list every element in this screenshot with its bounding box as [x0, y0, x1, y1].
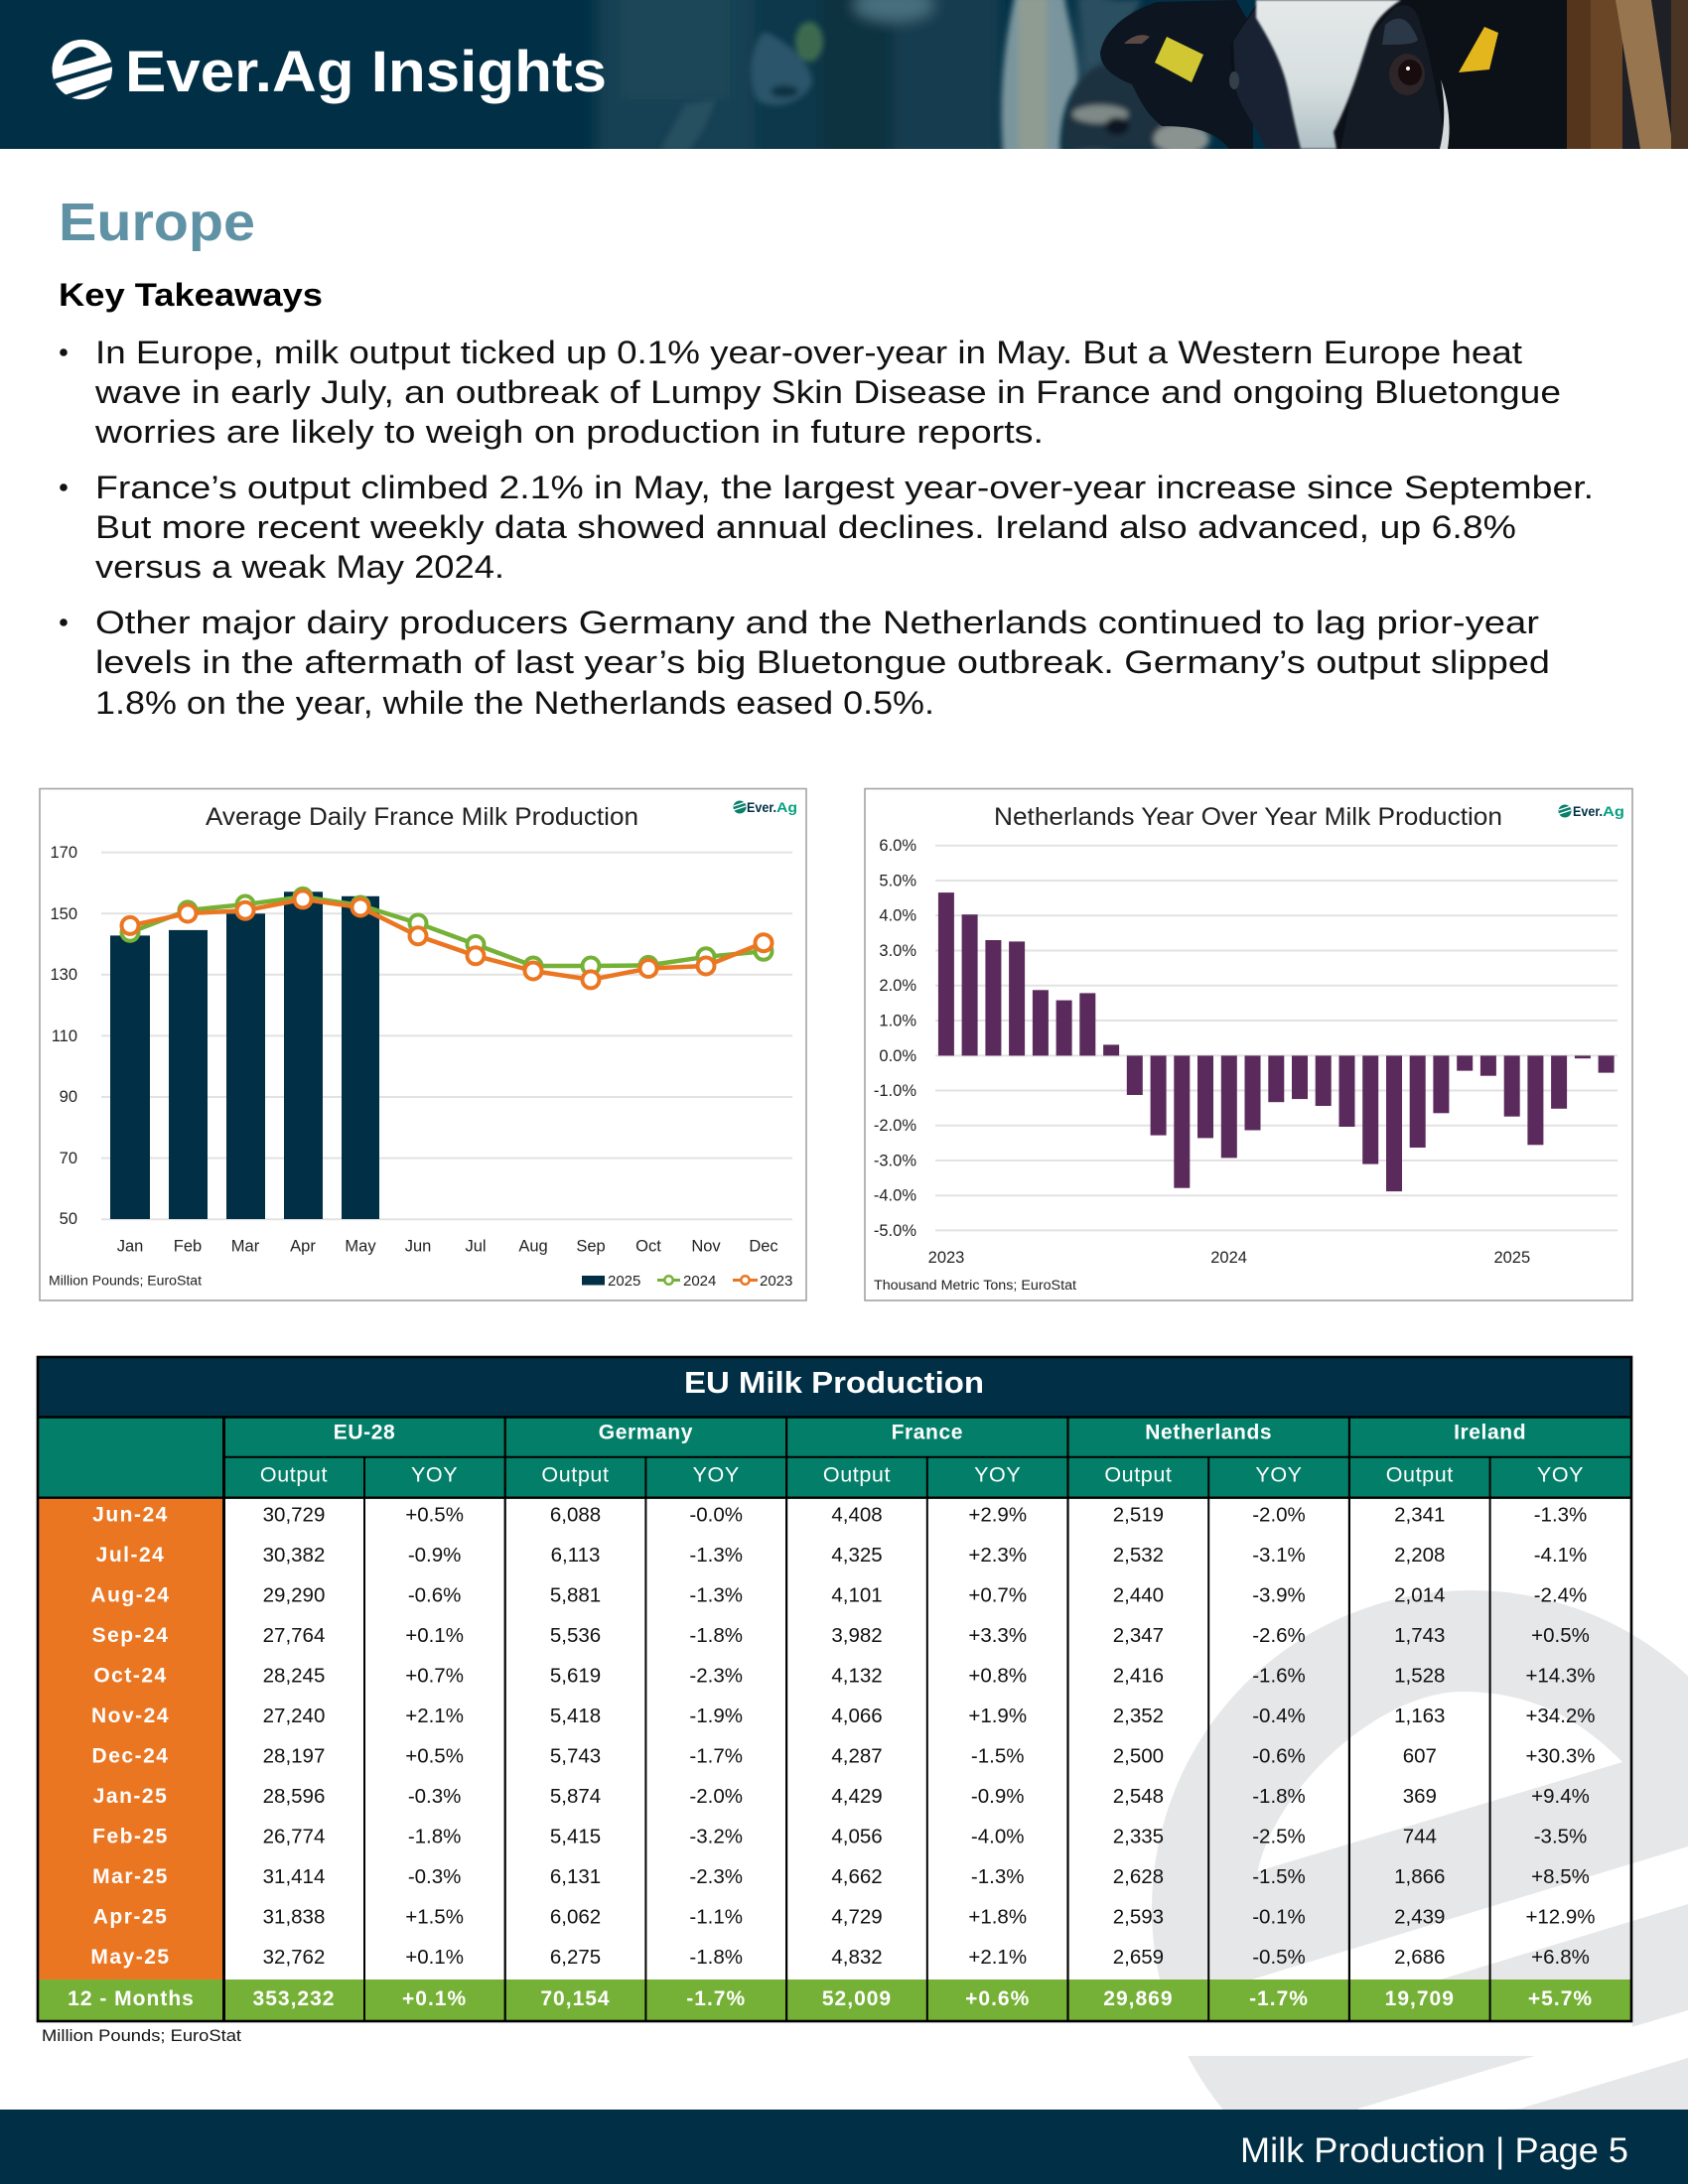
row Jan-25: -0.9% [971, 1785, 1024, 1808]
row May-25: 6,275 [550, 1946, 601, 1969]
row Mar-25: -2.3% [689, 1865, 743, 1888]
table column headers: Output [541, 1463, 610, 1487]
row Nov-24: -0.4% [1252, 1705, 1306, 1727]
row Mar-25 [92, 1865, 1590, 1888]
y axis labels: 150 [50, 905, 77, 923]
row Feb-25: -1.8% [408, 1825, 461, 1848]
row Dec-24: 4,287 [831, 1745, 883, 1767]
row Oct-24: +0.8% [968, 1664, 1027, 1688]
row May-25: May-25 [90, 1946, 171, 1969]
row Apr-25: 31,838 [263, 1906, 325, 1928]
row Jan-25: 5,874 [550, 1785, 601, 1808]
bullet 1: wave in early July, an outbreak of Lumpy Skin Disease in France and ongoing Bluetongue [94, 374, 1561, 410]
row Jan-25: -2.0% [689, 1785, 743, 1808]
row Oct-24: 5,619 [550, 1664, 601, 1688]
table column headers: YOY [411, 1463, 458, 1487]
row Jun-24: -0.0% [689, 1503, 743, 1527]
chart legend: 2023 [760, 1273, 792, 1290]
y axis labels: -4.0% [874, 1187, 916, 1205]
row Sep-24: +0.1% [405, 1624, 464, 1647]
y axis labels [874, 837, 916, 1240]
row Jun-24: +0.5% [405, 1503, 464, 1527]
row Sep-24: 2,347 [1113, 1624, 1164, 1647]
row Nov-24: 2,352 [1113, 1705, 1164, 1727]
chart legend: 2024 [683, 1273, 716, 1290]
bars year over year [938, 892, 1615, 1191]
row Dec-24 [92, 1745, 1596, 1767]
small logo: Ag [1603, 803, 1624, 819]
row Dec-24: -1.5% [971, 1745, 1024, 1767]
brand logo icon [50, 40, 114, 101]
table column headers: France [892, 1422, 963, 1443]
subheading: Key Takeaways: Key Takeaways [59, 277, 323, 313]
row Nov-24: 27,240 [263, 1705, 325, 1727]
row Jan-25: 369 [1403, 1785, 1437, 1808]
row May-25: 2,686 [1394, 1946, 1445, 1969]
row 12 - Months total: 12 - Months [68, 1987, 195, 2010]
row Jun-24: 30,729 [263, 1503, 325, 1527]
row May-25: +2.1% [968, 1946, 1027, 1969]
row Dec-24: Dec-24 [92, 1745, 169, 1767]
row Aug-24: -0.6% [408, 1584, 461, 1606]
chart legend: 2025 [608, 1273, 640, 1290]
chart panel: Average Daily France Milk Production [40, 788, 806, 1300]
row Jul-24: -4.1% [1534, 1544, 1587, 1567]
row Mar-25: -0.3% [408, 1865, 461, 1888]
row Jul-24: 6,113 [551, 1544, 600, 1567]
row Feb-25: 5,415 [550, 1825, 601, 1848]
row Dec-24: -0.6% [1252, 1745, 1306, 1767]
y axis labels: -1.0% [874, 1082, 916, 1100]
header banner [0, 0, 1688, 149]
row Nov-24: 4,066 [831, 1705, 883, 1727]
row Oct-24: 1,528 [1394, 1664, 1445, 1688]
row Apr-25: 4,729 [831, 1906, 883, 1928]
x axis months [117, 1237, 778, 1255]
table title band [38, 1357, 1631, 1417]
y axis labels: 110 [52, 1027, 77, 1045]
x axis years [928, 1249, 1530, 1267]
line 2024 [121, 888, 773, 975]
row May-25: 32,762 [263, 1946, 325, 1969]
row Aug-24: 2,440 [1113, 1584, 1164, 1606]
row Nov-24: Nov-24 [91, 1705, 170, 1727]
row Jan-25: -1.8% [1252, 1785, 1306, 1808]
table 12-month total band [38, 1979, 1631, 2021]
chart source note: Million Pounds; EuroStat [49, 1273, 202, 1289]
row May-25 [90, 1946, 1590, 1969]
table column headers: Output [260, 1463, 328, 1487]
row Oct-24: 4,132 [831, 1664, 883, 1688]
x axis months: Sep [576, 1237, 606, 1255]
row Aug-24: -3.9% [1252, 1584, 1306, 1606]
y axis labels: -3.0% [874, 1152, 916, 1169]
y axis labels: 50 [60, 1210, 77, 1228]
small logo: Ever. [1573, 803, 1603, 819]
row Nov-24: -1.9% [689, 1705, 743, 1727]
row Mar-25: Mar-25 [92, 1865, 169, 1888]
x axis months: Jan [117, 1237, 143, 1255]
x axis years: 2024 [1210, 1249, 1247, 1267]
row Feb-25: 4,056 [831, 1825, 883, 1848]
section heading: Europe: Europe [59, 193, 255, 252]
row Nov-24: +34.2% [1525, 1705, 1596, 1727]
row Jun-24: -1.3% [1534, 1503, 1587, 1527]
table: EU Milk Production [38, 1357, 1631, 2021]
row Oct-24: Oct-24 [93, 1664, 168, 1688]
row May-25: -1.8% [689, 1946, 743, 1969]
blurred cow in foreground left [1062, 65, 1209, 155]
row Mar-25: 31,414 [263, 1865, 325, 1888]
y axis labels: -2.0% [874, 1117, 916, 1135]
row Dec-24: 28,197 [263, 1745, 325, 1767]
row Mar-25: 4,662 [831, 1865, 883, 1888]
row Jul-24 [96, 1544, 1587, 1567]
y axis labels: 3.0% [879, 942, 916, 960]
row 12 - Months total: -1.7% [1249, 1987, 1309, 2010]
x axis months: Jul [465, 1237, 487, 1255]
x axis months: Dec [749, 1237, 778, 1255]
row Mar-25: -1.5% [1252, 1865, 1306, 1888]
row May-25: +0.1% [405, 1946, 464, 1969]
bullet 2: France’s output climbed 2.1% in May, the largest year-over-year increase since September. [95, 470, 1594, 505]
row Jul-24: 4,325 [831, 1544, 883, 1567]
table column headers [38, 1417, 1631, 1498]
table column headers: EU-28 [334, 1422, 395, 1443]
row Feb-25: -2.5% [1252, 1825, 1306, 1848]
row Sep-24: +3.3% [968, 1624, 1027, 1647]
row Jul-24: -0.9% [408, 1544, 461, 1567]
row Jun-24: 4,408 [831, 1503, 883, 1527]
y axis labels: -5.0% [874, 1222, 916, 1240]
footer bar [0, 2110, 1688, 2184]
y axis labels: 130 [50, 966, 77, 984]
table column headers: YOY [1255, 1463, 1303, 1487]
row Mar-25: 6,131 [550, 1865, 601, 1888]
row Jan-25: 28,596 [263, 1785, 325, 1808]
chart title: Average Daily France Milk Production [206, 803, 638, 831]
row Jun-24: 6,088 [550, 1503, 601, 1527]
row Apr-25: -0.1% [1252, 1906, 1306, 1928]
table column headers: YOY [974, 1463, 1021, 1487]
row Jun-24: +2.9% [968, 1503, 1027, 1527]
row Dec-24: -1.7% [689, 1745, 743, 1767]
x axis months: Jun [405, 1237, 431, 1255]
background watermark logo [1152, 1590, 1688, 2110]
row Dec-24: 607 [1403, 1745, 1437, 1767]
table column headers: Netherlands [1145, 1422, 1272, 1443]
bullet 3: 1.8% on the year, while the Netherlands eased 0.5%. [95, 685, 934, 721]
bullet 3 [60, 605, 1550, 721]
row May-25: 2,659 [1113, 1946, 1164, 1969]
row Nov-24: +1.9% [968, 1705, 1027, 1727]
row Oct-24 [93, 1664, 1596, 1688]
row Dec-24: 5,743 [550, 1745, 601, 1767]
x axis years: 2025 [1493, 1249, 1530, 1267]
row Jun-24: -2.0% [1252, 1503, 1306, 1527]
row Jun-24 [92, 1503, 1587, 1527]
row Aug-24: 29,290 [263, 1584, 325, 1606]
row May-25: -0.5% [1252, 1946, 1306, 1969]
row Jan-25: +9.4% [1531, 1785, 1590, 1808]
row Jan-25: Jan-25 [93, 1785, 168, 1808]
table column headers: Output [1104, 1463, 1172, 1487]
row Jul-24: Jul-24 [96, 1544, 165, 1567]
row Aug-24 [90, 1584, 1587, 1606]
row Mar-25: -1.3% [971, 1865, 1024, 1888]
row 12 - Months total: +0.1% [402, 1987, 467, 2010]
row Feb-25: 744 [1403, 1825, 1437, 1848]
chart source note: Thousand Metric Tons; EuroStat [874, 1278, 1076, 1293]
y axis labels: 5.0% [879, 872, 916, 889]
row Aug-24: +0.7% [968, 1584, 1027, 1606]
row Oct-24: -2.3% [689, 1664, 743, 1688]
chart legend [582, 1273, 792, 1290]
row Feb-25: -3.5% [1534, 1825, 1587, 1848]
row 12 - Months total: 353,232 [253, 1987, 335, 2010]
bullet 1 [60, 335, 1561, 450]
row Dec-24: +0.5% [405, 1745, 464, 1767]
row Jan-25 [93, 1785, 1590, 1808]
row Jan-25: 4,429 [831, 1785, 883, 1808]
row Apr-25: 2,593 [1113, 1906, 1164, 1928]
bullet 3: levels in the aftermath of last year’s big Bluetongue outbreak. Germany’s output slipped [95, 644, 1550, 680]
row Apr-25: Apr-25 [93, 1906, 168, 1928]
table column headers: YOY [693, 1463, 740, 1487]
small logo: Ever. [747, 799, 776, 815]
header brand title: Ever.Ag Insights [125, 40, 607, 104]
row Aug-24: 2,014 [1394, 1584, 1445, 1606]
row Aug-24: 4,101 [831, 1584, 883, 1606]
row Oct-24: +14.3% [1525, 1664, 1596, 1688]
row Sep-24: 27,764 [263, 1624, 325, 1647]
bullet 3: Other major dairy producers Germany and the Netherlands continued to lag prior-year [95, 605, 1539, 640]
row Aug-24: 5,881 [550, 1584, 601, 1606]
row Sep-24: Sep-24 [92, 1624, 169, 1647]
row Mar-25: +8.5% [1531, 1865, 1590, 1888]
bullet 2: But more recent weekly data showed annual declines. Ireland also advanced, up 6.8% [95, 509, 1516, 545]
row Apr-25: -1.1% [689, 1906, 743, 1928]
row Mar-25: 1,866 [1394, 1865, 1445, 1888]
row Sep-24: +0.5% [1531, 1624, 1590, 1647]
row Apr-25: +1.5% [405, 1906, 464, 1928]
row Apr-25: 6,062 [550, 1906, 601, 1928]
row Jan-25: 2,548 [1113, 1785, 1164, 1808]
row Sep-24: 3,982 [831, 1624, 883, 1647]
y axis labels: 170 [50, 844, 77, 862]
row Jan-25: -0.3% [408, 1785, 461, 1808]
row Sep-24: -1.8% [689, 1624, 743, 1647]
footer page label: Milk Production | Page 5 [1240, 2131, 1628, 2170]
x axis months: Aug [518, 1237, 548, 1255]
row Jul-24: -1.3% [689, 1544, 743, 1567]
row Oct-24: 2,416 [1113, 1664, 1164, 1688]
row Dec-24: 2,500 [1113, 1745, 1164, 1767]
takeaways text block [60, 335, 1594, 721]
row Nov-24 [91, 1705, 1596, 1727]
row Sep-24: 1,743 [1394, 1624, 1445, 1647]
small logo [1559, 803, 1624, 819]
y axis labels: 90 [60, 1088, 77, 1106]
bullet 2 [60, 470, 1594, 585]
bullet 1: worries are likely to weigh on production in future reports. [94, 414, 1044, 450]
row Feb-25 [92, 1825, 1587, 1848]
row Feb-25: Feb-25 [92, 1825, 169, 1848]
row Aug-24: Aug-24 [90, 1584, 171, 1606]
row Jun-24: 2,341 [1394, 1503, 1445, 1527]
row May-25: +6.8% [1531, 1946, 1590, 1969]
row Jun-24: 2,519 [1113, 1503, 1164, 1527]
row Sep-24 [92, 1624, 1590, 1647]
small logo: Ag [776, 799, 797, 815]
table column headers: Output [823, 1463, 891, 1487]
row Apr-25 [93, 1906, 1596, 1928]
row Aug-24: -2.4% [1534, 1584, 1587, 1606]
row Sep-24: 5,536 [550, 1624, 601, 1647]
table title band: EU Milk Production [684, 1365, 984, 1400]
row Jul-24: 30,382 [263, 1544, 325, 1567]
y axis labels: 2.0% [879, 977, 916, 995]
row Nov-24: 1,163 [1394, 1705, 1445, 1727]
table month column fill [38, 1498, 223, 1979]
row Nov-24: 5,418 [550, 1705, 601, 1727]
row Feb-25: 2,335 [1113, 1825, 1164, 1848]
x axis months: Feb [174, 1237, 202, 1255]
row Jul-24: 2,208 [1394, 1544, 1445, 1567]
row Apr-25: 2,439 [1394, 1906, 1445, 1928]
icon: cow ear with yellow tag [1100, 0, 1253, 149]
row Jul-24: -3.1% [1252, 1544, 1306, 1567]
row Jul-24: +2.3% [968, 1544, 1027, 1567]
row Apr-25: +12.9% [1525, 1906, 1596, 1928]
x axis months: Oct [635, 1237, 661, 1255]
row 12 - Months total: 52,009 [822, 1987, 892, 2010]
small logo [733, 799, 797, 815]
row Oct-24: +0.7% [405, 1664, 464, 1688]
table source note: Million Pounds; EuroStat [42, 2026, 241, 2045]
row Jul-24: 2,532 [1113, 1544, 1164, 1567]
row 12 - Months total: +0.6% [965, 1987, 1030, 2010]
row Sep-24: -2.6% [1252, 1624, 1306, 1647]
y axis labels [50, 844, 77, 1228]
row Oct-24: -1.6% [1252, 1664, 1306, 1688]
icon: rusty barn poles [1567, 0, 1688, 149]
row Apr-25: +1.8% [968, 1906, 1027, 1928]
chart title: Netherlands Year Over Year Milk Production [994, 803, 1502, 831]
x axis months: Nov [691, 1237, 721, 1255]
row Aug-24: -1.3% [689, 1584, 743, 1606]
row Jun-24: Jun-24 [92, 1503, 169, 1527]
row Feb-25: -3.2% [689, 1825, 743, 1848]
y axis labels: 6.0% [879, 837, 916, 855]
x axis months: Mar [231, 1237, 260, 1255]
row 12 - Months total: 19,709 [1385, 1987, 1455, 2010]
row Feb-25: 26,774 [263, 1825, 325, 1848]
row Mar-25: 2,628 [1113, 1865, 1164, 1888]
bars 2025 [110, 891, 379, 1219]
row 12 - Months total: +5.7% [1528, 1987, 1593, 2010]
row 12 - Months total: 70,154 [540, 1987, 611, 2010]
x axis months: May [345, 1237, 376, 1255]
table column headers: Germany [599, 1422, 693, 1443]
y axis labels: 4.0% [879, 907, 916, 925]
chart panel: Netherlands Year Over Year Milk Production [865, 788, 1632, 1300]
table column headers: YOY [1537, 1463, 1584, 1487]
y axis labels: 0.0% [879, 1047, 916, 1065]
bullet 2: versus a weak May 2024. [95, 549, 504, 585]
row Oct-24: 28,245 [263, 1664, 325, 1688]
y axis labels: 1.0% [879, 1013, 916, 1030]
icon: cow head [1229, 0, 1579, 149]
row May-25: 4,832 [831, 1946, 883, 1969]
line 2023 [121, 890, 773, 988]
x axis years: 2023 [928, 1249, 964, 1267]
bullet 1: In Europe, milk output ticked up 0.1% year-over-year in May. But a Western Europe heat [95, 335, 1522, 370]
y axis labels: 70 [60, 1150, 77, 1167]
row 12 - Months total: -1.7% [686, 1987, 746, 2010]
row Nov-24: +2.1% [405, 1705, 464, 1727]
row Feb-25: -4.0% [971, 1825, 1024, 1848]
table column headers: Output [1386, 1463, 1454, 1487]
x axis months: Apr [290, 1237, 316, 1255]
blurred background cows [592, 0, 1142, 149]
row Dec-24: +30.3% [1525, 1745, 1596, 1767]
row 12 - Months total [68, 1987, 1593, 2010]
table column headers: Ireland [1454, 1422, 1526, 1443]
row 12 - Months total: 29,869 [1103, 1987, 1174, 2010]
